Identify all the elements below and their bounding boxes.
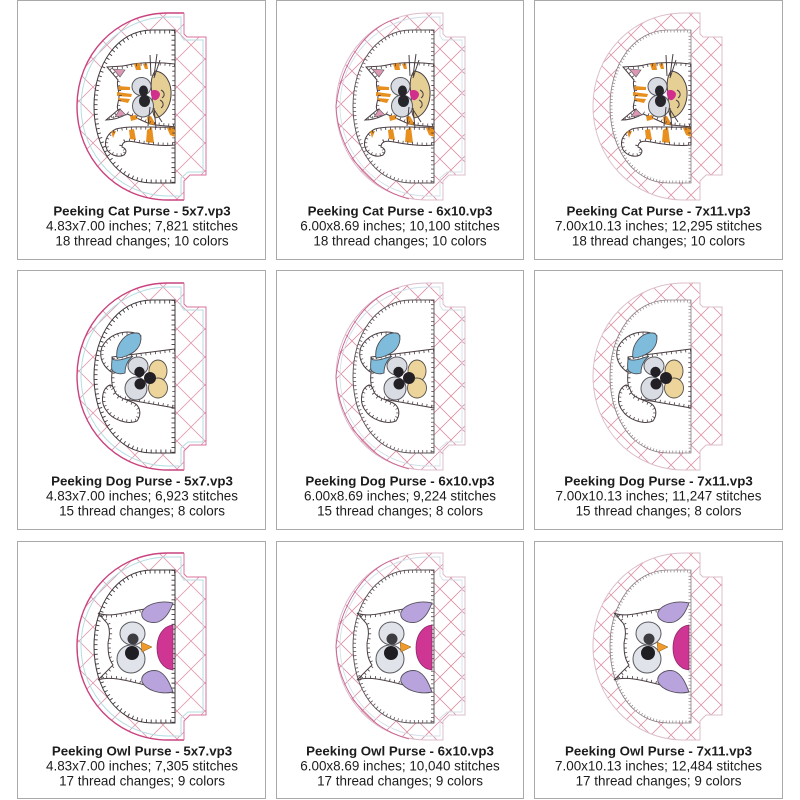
- caption: 7.00x10.13 inches; 12,484 stitches: [555, 758, 762, 774]
- icon: peeking dog: [360, 332, 434, 422]
- caption: [300, 744, 500, 788]
- panel: Peeking Cat Purse 5x7: [18, 0, 266, 260]
- caption: Peeking Cat Purse - 5x7.vp3: [53, 204, 231, 218]
- caption: Peeking Owl Purse - 5x7.vp3: [52, 744, 232, 758]
- purse shell: [77, 283, 206, 470]
- icon: peeking dog: [617, 332, 691, 422]
- panel: Peeking Owl Purse 7x11: [534, 542, 782, 798]
- caption: 6.00x8.69 inches; 10,100 stitches: [300, 218, 500, 234]
- purse shell: [593, 553, 722, 740]
- panel: Peeking Cat Purse 6x10: [276, 0, 524, 260]
- caption: Peeking Dog Purse - 5x7.vp3: [51, 474, 233, 488]
- caption: Peeking Dog Purse - 7x11.vp3: [564, 474, 753, 488]
- caption: [46, 204, 238, 248]
- icon: peeking cat: [621, 54, 691, 156]
- caption: [300, 204, 500, 248]
- icon: peeking dog: [101, 332, 175, 422]
- purse shell: [336, 553, 465, 740]
- caption: 7.00x10.13 inches; 11,247 stitches: [556, 488, 762, 504]
- caption: 17 thread changes; 9 colors: [576, 774, 742, 788]
- caption: 18 thread changes; 10 colors: [572, 234, 745, 248]
- caption: [46, 744, 238, 788]
- purse shell: [77, 13, 206, 200]
- panel: Peeking Dog Purse 5x7: [18, 270, 266, 530]
- caption: 18 thread changes; 10 colors: [313, 234, 487, 248]
- caption: 17 thread changes; 9 colors: [59, 774, 225, 788]
- icon: peeking cat: [105, 54, 175, 156]
- icon: peeking owl: [357, 602, 432, 693]
- icon: peeking owl: [614, 602, 689, 693]
- caption: Peeking Owl Purse - 7x11.vp3: [565, 744, 752, 758]
- caption: 15 thread changes; 8 colors: [576, 504, 742, 518]
- purse shell: [336, 13, 465, 200]
- caption: 4.83x7.00 inches; 7,305 stitches: [46, 758, 238, 774]
- caption: Peeking Owl Purse - 6x10.vp3: [306, 744, 494, 758]
- panel: Peeking Owl Purse 6x10: [276, 542, 524, 798]
- purse shell: [77, 553, 206, 740]
- caption: 4.83x7.00 inches; 7,821 stitches: [46, 218, 238, 234]
- caption: Peeking Dog Purse - 6x10.vp3: [305, 474, 495, 488]
- caption: [555, 744, 762, 788]
- caption: [555, 204, 762, 248]
- caption: [46, 474, 238, 518]
- caption: 4.83x7.00 inches; 6,923 stitches: [46, 488, 238, 504]
- panel: Peeking Cat Purse 7x11: [534, 0, 782, 260]
- caption: 18 thread changes; 10 colors: [55, 234, 229, 248]
- caption: Peeking Cat Purse - 6x10.vp3: [308, 204, 492, 218]
- panel: Peeking Dog Purse 7x11: [534, 270, 782, 530]
- icon: peeking cat: [364, 54, 434, 156]
- caption: 15 thread changes; 8 colors: [317, 504, 483, 518]
- purse shell: [593, 13, 722, 200]
- caption: [556, 474, 762, 518]
- icon: peeking owl: [98, 602, 173, 693]
- caption: 17 thread changes; 9 colors: [317, 774, 483, 788]
- caption: 6.00x8.69 inches; 10,040 stitches: [300, 758, 500, 774]
- purse shell: [336, 283, 465, 470]
- purse shell: [593, 283, 722, 470]
- caption: Peeking Cat Purse - 7x11.vp3: [566, 204, 751, 218]
- caption: 6.00x8.69 inches; 9,224 stitches: [304, 488, 496, 504]
- caption: 15 thread changes; 8 colors: [59, 504, 225, 518]
- panel: Peeking Owl Purse 5x7: [18, 542, 266, 798]
- caption: 7.00x10.13 inches; 12,295 stitches: [555, 218, 762, 234]
- caption: [304, 474, 496, 518]
- panel: Peeking Dog Purse 6x10: [276, 270, 524, 530]
